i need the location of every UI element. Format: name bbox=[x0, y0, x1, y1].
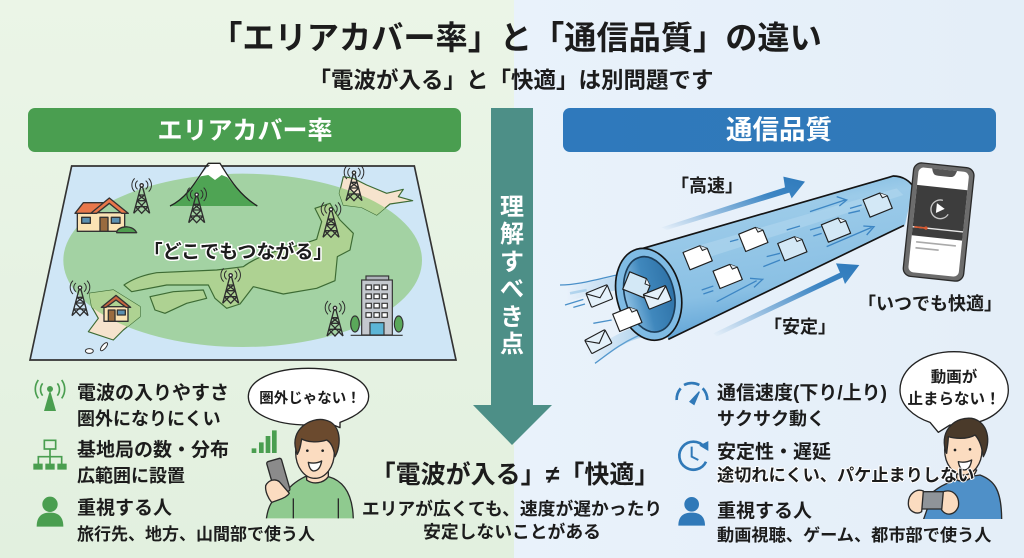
icon: clock bbox=[679, 441, 708, 470]
arrow: upper speed bbox=[662, 177, 805, 230]
figure bbox=[908, 418, 1002, 520]
icon: antenna signal bbox=[35, 380, 65, 411]
text: 重視する人: 重視する人 bbox=[717, 500, 812, 522]
text: 圏外になりにくい: 圏外になりにくい bbox=[77, 409, 221, 429]
pipe illustration bbox=[560, 162, 975, 363]
text: サクサク動く: サクサク動く bbox=[717, 409, 825, 429]
internal flow arrows bbox=[702, 197, 874, 302]
text: 基地局の数・分布: 基地局の数・分布 bbox=[77, 439, 229, 461]
text: 重視する人: 重視する人 bbox=[77, 497, 172, 519]
person with smartphone bbox=[248, 368, 369, 522]
label: 高速: 「高速」 bbox=[671, 176, 743, 196]
title: 「エリアカバー率」と「通信品質」の違い bbox=[210, 20, 822, 56]
wind lines bbox=[560, 274, 640, 363]
bubble text: 動画が bbox=[931, 367, 978, 386]
label: 安定: 「安定」 bbox=[764, 317, 836, 337]
text: 電波の入りやすさ: 電波の入りやすさ bbox=[77, 382, 229, 404]
background: left green half bbox=[0, 0, 514, 558]
bubble text: 圏外じゃない！ bbox=[259, 390, 361, 407]
speech bubble bbox=[900, 352, 1008, 432]
conclusion line 1: エリアが広くても、速度が遅かったり bbox=[362, 498, 662, 519]
Kyushu bbox=[85, 290, 140, 353]
Hokkaido bbox=[339, 177, 413, 215]
center arrow: 理解すべき点: べ bbox=[500, 276, 524, 303]
Shikoku bbox=[150, 290, 207, 313]
center arrow: 理解すべき点: 点 bbox=[500, 331, 524, 358]
center arrow: 理解すべき点 bbox=[473, 108, 552, 445]
speech bubble bbox=[248, 368, 369, 428]
phone bbox=[903, 162, 975, 282]
text: 安定性・遅延: 安定性・遅延 bbox=[717, 441, 831, 463]
center arrow: 理解すべき点: す bbox=[500, 249, 524, 276]
signal bars bbox=[252, 430, 277, 453]
label: いつでも快適: 「いつでも快適」 bbox=[858, 294, 1002, 314]
background: right blue half bbox=[514, 0, 1024, 558]
conclusion heading: 「電波が入る」≠「快適」 bbox=[371, 460, 659, 489]
map label: 「どこでもつながる」 bbox=[144, 240, 332, 263]
text: 途切れにくい: 途切れにくい、パケ止まりしない bbox=[717, 465, 974, 485]
right feature list bbox=[677, 382, 992, 545]
text: 通信速度: 通信速度(下り/上り) bbox=[717, 382, 887, 404]
icon: speedometer bbox=[677, 383, 707, 404]
panel header: エリアカバー率 bbox=[28, 108, 461, 152]
tube body bbox=[635, 176, 913, 339]
center arrow: 理解すべき点: き bbox=[500, 304, 524, 331]
office building bbox=[351, 276, 403, 335]
mountain bbox=[170, 163, 257, 206]
map illustration bbox=[30, 163, 456, 360]
arrow: lower stability bbox=[713, 263, 859, 337]
icon: person bbox=[678, 497, 705, 526]
house large bbox=[75, 198, 137, 233]
panel header: 通信品質 bbox=[563, 108, 996, 152]
center arrow: 理解すべき点: 理 bbox=[500, 194, 524, 221]
panel header: 通信品質: 通信品質 bbox=[726, 115, 832, 145]
text: 旅行先: 旅行先、地方、山間部で使う人 bbox=[77, 524, 315, 544]
Honshu bbox=[124, 203, 353, 308]
icon: person bbox=[37, 497, 63, 527]
tube mouth bbox=[606, 241, 691, 347]
text: 動画視聴: 動画視聴、ゲーム、都市部で使う人 bbox=[717, 525, 992, 545]
data packets bbox=[585, 191, 892, 354]
center arrow: 理解すべき点: 解 bbox=[500, 221, 524, 248]
conclusion bbox=[362, 460, 662, 542]
figure bbox=[266, 419, 353, 522]
text: 広範囲に設置: 広範囲に設置 bbox=[77, 465, 185, 486]
icon: network bbox=[33, 440, 67, 470]
conclusion line 2: 安定しないことがある bbox=[423, 521, 601, 542]
house small bbox=[101, 295, 131, 321]
towers bbox=[70, 166, 364, 336]
person with game phone bbox=[900, 352, 1008, 520]
subtitle: 「電波が入る」と「快適」は別問題です bbox=[308, 67, 714, 93]
bubble text line 2: 止まらない！ bbox=[907, 390, 1001, 408]
left feature list bbox=[33, 380, 315, 544]
panel header: エリアカバー率: エリアカバー率 bbox=[157, 117, 333, 145]
